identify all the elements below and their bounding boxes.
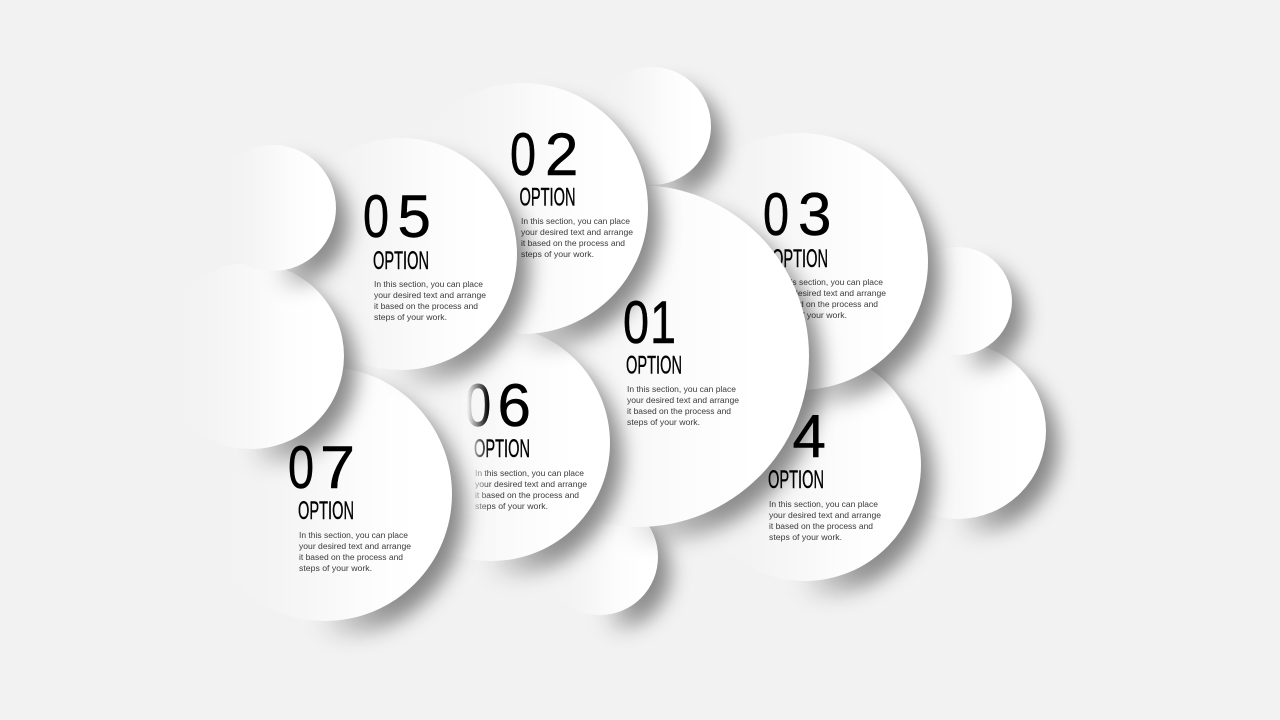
panel: option 01 [467,185,821,542]
body text 02: it based on the process and [521,238,625,248]
number 05: 5 [398,183,431,250]
number 04: 0 [757,403,783,470]
body text 04: In this section, you can place [769,499,878,509]
body text 02 [521,216,633,259]
heading: option 06: OPTION [474,435,530,463]
body text 03: it based on the process and [774,299,878,309]
heading: option 01: OPTION [626,352,682,380]
number 01: 1 [650,289,676,356]
panel: option 02 [397,83,660,349]
body text 05: your desired text and arrange [374,290,486,300]
number 07: 0 [288,434,314,501]
body text 04: steps of your work. [769,532,842,542]
panel: option 03 [671,133,940,405]
body text 06: your desired text and arrange [475,479,587,489]
number 05: 0 [363,183,389,250]
heading: option 07: OPTION [298,497,354,525]
number 01: 0 [623,289,649,356]
number 06: 0 [465,372,491,439]
body text 07: steps of your work. [299,563,372,573]
decorative circle: right small [904,247,1024,370]
number 02: 2 [545,121,578,188]
body text 07: your desired text and arrange [299,541,411,551]
body text 03: In this section, you can place [774,277,883,287]
body text 07: it based on the process and [299,552,403,562]
number 06: 6 [498,372,531,439]
number 05 [363,183,431,250]
number 07 [288,434,355,502]
number 03 [763,181,831,248]
body text 03: steps of your work. [774,310,847,320]
number 03: 0 [763,181,789,248]
body text 01: it based on the process and [627,406,731,416]
body text 06: In this section, you can place [475,468,584,478]
body text 02: your desired text and arrange [521,227,633,237]
body text 01: your desired text and arrange [627,395,739,405]
body text 05: steps of your work. [374,312,447,322]
body text 06: it based on the process and [475,490,579,500]
decorative circle: bottom small [542,499,670,630]
panel: option 04 [689,349,933,596]
decorative circle: left middle [158,263,356,464]
body text 02: In this section, you can place [521,216,630,226]
number 06 [465,372,531,439]
panel: option 05 [285,138,529,385]
body text 05: In this section, you can place [374,279,483,289]
body text 01: steps of your work. [627,417,700,427]
panel: option 07 [198,367,464,636]
body text 05 [374,279,486,322]
body text 07: In this section, you can place [299,530,408,540]
number 02 [510,121,578,188]
decorative circle: right large [870,343,1058,534]
panel: option 06 [374,325,622,576]
number 07: 7 [320,434,355,502]
number 04: 4 [792,403,826,470]
number 03: 3 [798,181,831,248]
body text 01: In this section, you can place [627,384,736,394]
heading: option 04: OPTION [768,466,824,494]
number 04 [757,403,826,470]
heading: option 02: OPTION [520,184,576,212]
body text 05: it based on the process and [374,301,478,311]
number 01 [623,289,676,356]
body text 01 [627,384,739,427]
body text 04 [769,499,881,542]
body text 07 [299,530,411,573]
number 02: 0 [510,121,536,188]
body text 02: steps of your work. [521,249,594,259]
heading: option 03: OPTION [772,245,828,273]
body text 04: it based on the process and [769,521,873,531]
body text 06 [475,468,587,511]
body text 03: your desired text and arrange [774,288,886,298]
body text 03 [774,277,886,320]
decorative circle: left small [210,145,348,286]
decorative circle: top small [593,67,723,200]
body text 04: your desired text and arrange [769,510,881,520]
body text 06: steps of your work. [475,501,548,511]
heading: option 05: OPTION [373,247,429,275]
